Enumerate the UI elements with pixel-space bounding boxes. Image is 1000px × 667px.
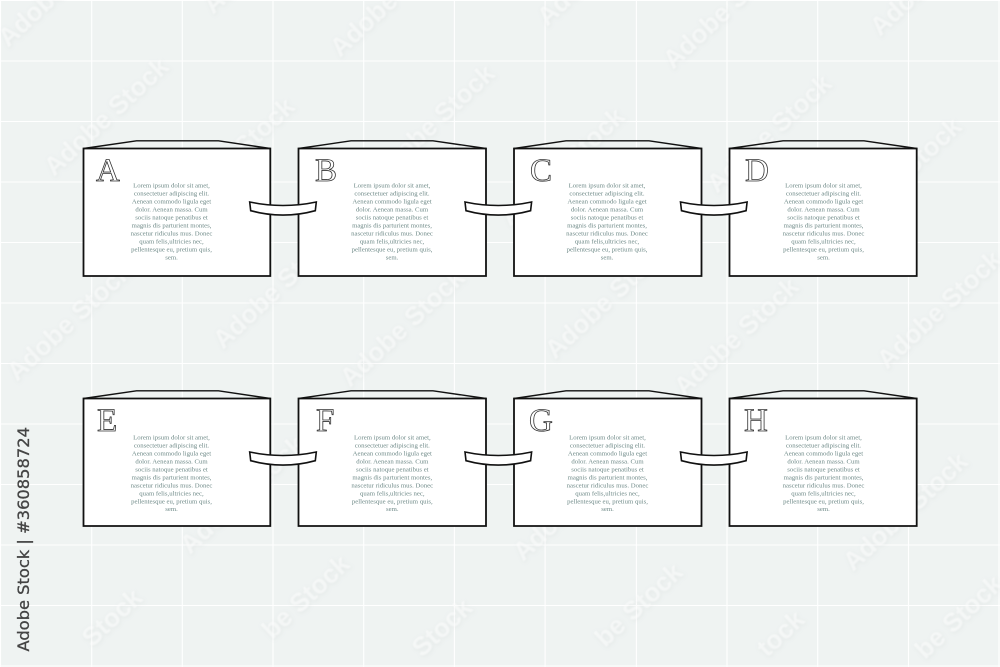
text block D: Lorem ipsum dolor sit amet, [785, 183, 862, 190]
text block C: nascetur ridiculus mus. Donec [566, 231, 648, 238]
text block B: consectetuer adipiscing elit. [354, 191, 430, 198]
watermarks: Adobe Stock [831, 111, 968, 241]
text block F: dolor. Aenean massa. Cum [356, 458, 429, 465]
text block G: sem. [601, 506, 614, 513]
panel: E [84, 391, 270, 526]
panel: A [84, 141, 270, 276]
watermarks: Stock [406, 592, 478, 662]
text block H: sem. [817, 506, 830, 513]
text block F: Aenean commodo ligula eget [353, 450, 432, 457]
watermarks: Adobe Stock [364, 58, 501, 188]
connector: E to F [250, 452, 316, 465]
stock id label: Adobe Stock | #360858724 [14, 427, 33, 652]
text block D: consectetuer adipiscing elit. [786, 191, 861, 198]
letter G: G [529, 403, 553, 439]
text block D: pellentesque eu, pretium quis, [783, 247, 864, 254]
text block E: quam felis,ultricies nec, [139, 490, 204, 497]
text block E: nascetur ridiculus mus. Donec [131, 482, 212, 489]
text block H: dolor. Aenean massa. Cum [787, 458, 860, 465]
panel: G [514, 391, 702, 526]
text block A: dolor. Aenean massa. Cum [135, 207, 208, 214]
watermarks: Adobe Stock [837, 446, 974, 576]
text block F [351, 434, 433, 513]
connector: F to G [465, 452, 532, 465]
letter F: F [316, 403, 334, 439]
watermarks: Adobe Stock [668, 271, 805, 401]
text block D: Aenean commodo ligula eget [784, 199, 863, 206]
text block E: magnis dis parturient montes, [132, 474, 212, 481]
text block C: consectetuer adipiscing elit. [569, 191, 645, 198]
text block C: dolor. Aenean massa. Cum [571, 207, 644, 214]
letter C: C [530, 153, 552, 189]
letter A: A [96, 153, 120, 189]
text block A [131, 183, 212, 262]
text block H: Lorem ipsum dolor sit amet, [785, 434, 862, 441]
text block A: pellentesque eu, pretium quis, [131, 247, 212, 254]
text block H: Aenean commodo ligula eget [784, 450, 863, 457]
text block D: sem. [817, 255, 830, 262]
text block A: quam felis,ultricies nec, [139, 239, 204, 246]
connector: G to H [680, 452, 747, 465]
watermarks: Adobe Stock [507, 436, 644, 566]
watermarks: Adobe Stock [1, 256, 138, 386]
watermarks: Adobe Stock [164, 91, 301, 221]
text block A: nascetur ridiculus mus. Donec [131, 231, 212, 238]
panel: F [298, 391, 486, 526]
text block B: pellentesque eu, pretium quis, [352, 247, 433, 254]
text block E: consectetuer adipiscing elit. [134, 442, 209, 449]
text block E: sem. [165, 506, 178, 513]
text block B: sociis natoque penatibus et [356, 215, 428, 222]
letter E: E [97, 403, 117, 439]
text block C: Aenean commodo ligula eget [567, 199, 647, 206]
text block B: Aenean commodo ligula eget [352, 199, 432, 206]
watermarks: Adobe Stock [174, 429, 311, 559]
panel: D [730, 141, 917, 276]
text block D: sociis natoque penatibus et [787, 215, 860, 222]
text block B: Lorem ipsum dolor sit amet, [354, 183, 431, 190]
text block A: consectetuer adipiscing elit. [134, 191, 209, 198]
text block D: quam felis,ultricies nec, [791, 239, 856, 246]
letter B: B [315, 153, 337, 189]
text block F: sem. [386, 506, 399, 513]
panel: B [298, 141, 486, 276]
text block G [567, 434, 648, 513]
text block H: consectetuer adipiscing elit. [786, 442, 861, 449]
text block E: pellentesque eu, pretium quis, [131, 498, 212, 505]
text block C: magnis dis parturient montes, [567, 223, 647, 230]
text block G: nascetur ridiculus mus. Donec [567, 482, 648, 489]
text block B: sem. [386, 255, 399, 262]
watermarks: Adobe Stock [207, 224, 344, 354]
text block F: consectetuer adipiscing elit. [355, 442, 430, 449]
connector: C to D [680, 202, 747, 215]
text block B: nascetur ridiculus mus. Donec [351, 231, 433, 238]
text block B [351, 183, 433, 262]
text block G: dolor. Aenean massa. Cum [571, 458, 644, 465]
text block F: magnis dis parturient montes, [352, 474, 433, 481]
watermarks: Adobe Stock [494, 101, 631, 231]
watermarks: Adobe Stock [334, 262, 471, 392]
text block E: dolor. Aenean massa. Cum [135, 458, 208, 465]
text block C: sem. [601, 255, 614, 262]
text block E [131, 434, 212, 513]
text block F: quam felis,ultricies nec, [360, 490, 425, 497]
text block H: quam felis,ultricies nec, [791, 490, 856, 497]
text block D [783, 183, 864, 262]
text block G: Aenean commodo ligula eget [568, 450, 647, 457]
text block H: magnis dis parturient montes, [784, 474, 864, 481]
text block A: sem. [165, 255, 178, 262]
text block H [783, 434, 864, 513]
text block G: Lorem ipsum dolor sit amet, [569, 434, 646, 441]
text block A: magnis dis parturient montes, [132, 223, 212, 230]
text block E: Lorem ipsum dolor sit amet, [133, 434, 210, 441]
text block H: sociis natoque penatibus et [787, 466, 860, 473]
connector: A to B [250, 202, 316, 215]
panel: C [514, 141, 702, 276]
text block G: pellentesque eu, pretium quis, [567, 498, 648, 505]
text block C: pellentesque eu, pretium quis, [567, 247, 648, 254]
text block H: pellentesque eu, pretium quis, [783, 498, 864, 505]
text block D: magnis dis parturient montes, [784, 223, 864, 230]
text block G: sociis natoque penatibus et [571, 466, 644, 473]
text block F: nascetur ridiculus mus. Donec [351, 482, 433, 489]
text block A: sociis natoque penatibus et [135, 215, 208, 222]
watermarks: be Stock [589, 556, 689, 652]
text block D: dolor. Aenean massa. Cum [787, 207, 860, 214]
text block G: quam felis,ultricies nec, [575, 490, 640, 497]
text block C [566, 183, 648, 262]
text block D: nascetur ridiculus mus. Donec [783, 231, 864, 238]
text block B: dolor. Aenean massa. Cum [356, 207, 429, 214]
watermarks: Adobe Stock [539, 234, 676, 364]
text block A: Aenean commodo ligula eget [132, 199, 211, 206]
watermarks: Adobe Stock [701, 68, 838, 198]
text block E: Aenean commodo ligula eget [132, 450, 211, 457]
text block F: Lorem ipsum dolor sit amet, [354, 434, 431, 441]
text block B: magnis dis parturient montes, [352, 223, 432, 230]
watermarks: Stock [76, 582, 148, 652]
text block E: sociis natoque penatibus et [135, 466, 208, 473]
text block A: Lorem ipsum dolor sit amet, [133, 183, 210, 190]
letter D: D [745, 153, 769, 189]
panel: H [730, 391, 917, 526]
watermarks: tock [751, 604, 811, 662]
watermarks: be Stock [256, 548, 356, 644]
text block C: quam felis,ultricies nec, [575, 239, 640, 246]
text block C: Lorem ipsum dolor sit amet, [569, 183, 646, 190]
text block F: sociis natoque penatibus et [356, 466, 429, 473]
text block G: magnis dis parturient montes, [568, 474, 648, 481]
text block G: consectetuer adipiscing elit. [570, 442, 645, 449]
text block C: sociis natoque penatibus et [571, 215, 643, 222]
letter H: H [744, 403, 768, 439]
connector: B to C [465, 202, 532, 215]
text block H: nascetur ridiculus mus. Donec [783, 482, 864, 489]
watermarks: Adobe Stock [38, 51, 175, 181]
text block B: quam felis,ultricies nec, [360, 239, 425, 246]
text block F: pellentesque eu, pretium quis, [352, 498, 433, 505]
